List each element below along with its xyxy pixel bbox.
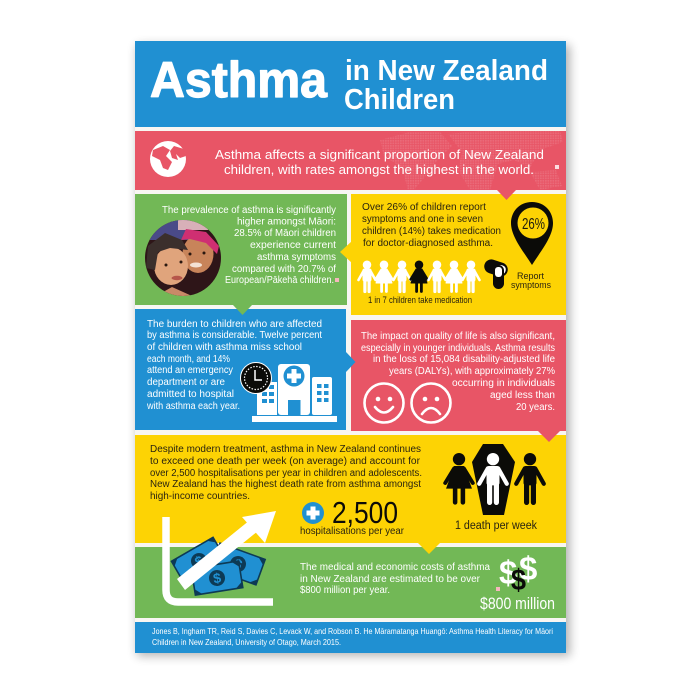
panel: citation footer <box>135 622 566 653</box>
stat: 2,500: 2,500 <box>332 495 398 530</box>
icon: pills <box>482 258 510 289</box>
small marker <box>335 278 339 282</box>
callout arrow: blue to pink <box>346 352 356 372</box>
prevalence text: experience current <box>250 240 336 251</box>
icon: seven children, one highlighted <box>358 261 480 292</box>
label: 1 in 7 children: 1 in 7 children take medication <box>368 295 472 306</box>
subtitle line one: in New Zealand <box>345 55 548 87</box>
intro text: Asthma affects a significant proportion of New Zealand <box>215 148 544 162</box>
icon: dollar signs <box>499 550 537 597</box>
burden text: admitted to hospital <box>147 389 234 400</box>
symptoms text: for doctor-diagnosed asthma. <box>363 238 493 249</box>
citation text: Children in New Zealand, University of Otago, March 2015. <box>152 637 341 647</box>
intro text: children, with rates amongst the highest in the world. <box>224 163 534 177</box>
panel: economic costs <box>135 547 566 618</box>
prevalence text: asthma symptoms <box>257 252 336 263</box>
prevalence text: The prevalence of asthma is significantly <box>162 205 336 216</box>
icon: location pin with 26% <box>511 202 553 265</box>
callout arrow: yellow to green <box>340 241 352 263</box>
mortality text: high-income countries. <box>150 491 250 502</box>
subtitle line two: Children <box>344 84 455 116</box>
arrow: rising trend <box>177 511 276 590</box>
intro text <box>215 148 544 177</box>
callout arrow: pink to yellow lower <box>538 431 560 442</box>
icon: globe <box>150 141 186 177</box>
poster sheet <box>135 41 566 653</box>
icon: coffin with figure <box>472 444 515 515</box>
mortality text: New Zealand has the highest death rate from asthma amongst <box>150 479 421 490</box>
icon: happy face <box>364 384 404 422</box>
quality of life text: occurring in individuals <box>452 378 555 389</box>
panel: symptoms and medication <box>351 194 566 315</box>
quality of life text: 20 years. <box>516 402 555 413</box>
icon: medical cross <box>302 502 324 524</box>
label: report symptoms: symptoms <box>511 280 551 291</box>
dotted world map background <box>380 131 563 190</box>
icon: clock <box>240 362 272 394</box>
mortality text: to exceed one death per week (on average) and account for <box>150 456 421 467</box>
burden text <box>146 319 322 412</box>
prevalence text: higher amongst Māori: <box>237 216 336 228</box>
quality of life text: in the loss of 15,084 disability-adjusted life <box>373 354 555 365</box>
costs text: The medical and economic costs of asthma <box>300 562 490 573</box>
panel: burden to children <box>135 309 346 430</box>
citation text <box>152 626 553 647</box>
quality of life text: especially in younger individuals. Asthma results <box>361 343 555 354</box>
icon: banknotes <box>171 537 265 595</box>
icon: dollar signs: $ <box>511 564 526 597</box>
label: report symptoms <box>511 271 551 291</box>
chart axes <box>166 517 273 602</box>
icon: dollar signs: $ <box>519 550 537 587</box>
quality of life text: years (DALYs), with approximately 27% <box>389 366 555 377</box>
quality of life text: aged less than <box>490 390 555 401</box>
prevalence text: compared with 20.7% of <box>232 264 336 275</box>
callout arrow: pink to yellow <box>497 190 516 200</box>
icon: hospital <box>252 364 337 422</box>
title: Asthma: Asthma <box>150 52 328 108</box>
panel: quality of life <box>351 320 566 431</box>
icon: location pin with 26%: 26% <box>522 216 545 233</box>
panel: prevalence in Māori children <box>135 194 347 305</box>
panel: mortality and hospitalisations <box>135 435 566 543</box>
mortality text <box>150 444 422 502</box>
burden text: department or are <box>147 377 225 388</box>
mortality text: over 2,500 hospitalisations per year in children and adolescents. <box>150 468 422 479</box>
costs text: in New Zealand are estimated to be over <box>300 574 481 585</box>
costs text <box>300 562 490 596</box>
burden text: The burden to children who are affected <box>147 319 322 330</box>
icon: woman figure <box>445 453 473 502</box>
burden text: of children with asthma miss school <box>147 342 302 353</box>
symptoms text: symptoms and one in seven <box>362 214 483 225</box>
burden text: by asthma is considerable. Twelve percent <box>147 330 322 341</box>
icon: sad face <box>412 384 450 422</box>
burden text: each month, and 14% <box>147 354 230 365</box>
callout arrow: yellow to green lower <box>418 543 440 554</box>
icon: banknotes: $ <box>192 552 207 570</box>
small marker <box>555 165 559 169</box>
label: 1 death per week: 1 death per week <box>455 520 537 532</box>
symptoms text: children (14%) takes medication <box>362 226 501 237</box>
mortality text: Despite modern treatment, asthma in New Zealand continues <box>150 444 421 455</box>
poster drop shadow <box>137 45 570 656</box>
panel: title header <box>135 41 566 127</box>
quality of life text <box>361 331 555 413</box>
stat label: hospitalisations per year <box>300 526 405 537</box>
symptoms text: Over 26% of children report <box>362 202 486 213</box>
label: report symptoms: Report <box>517 271 544 282</box>
burden text: with asthma each year. <box>146 401 240 412</box>
costs text: $800 million per year. <box>300 585 390 596</box>
photo: two children <box>145 218 221 296</box>
icon: banknotes: $ <box>232 555 245 573</box>
burden text: attend an emergency <box>147 365 233 376</box>
prevalence text <box>162 205 336 286</box>
stat: $800 million: $800 million <box>480 594 555 613</box>
panel: intro banner <box>135 131 566 190</box>
symptoms text <box>362 202 501 249</box>
prevalence text: European/Pākehā children. <box>225 275 334 286</box>
callout arrow: green to blue <box>233 305 252 315</box>
citation text: Jones B, Ingham TR, Reid S, Davies C, Levack W, and Robson B. He Māramatanga Huangō: Asthma Health Literacy for Māori <box>152 626 553 636</box>
small marker <box>496 587 500 591</box>
quality of life text: The impact on quality of life is also significant, <box>361 331 555 342</box>
icon: dollar signs: $ <box>499 554 517 591</box>
icon: banknotes: $ <box>212 569 222 586</box>
icon: man figure <box>516 453 544 502</box>
prevalence text: 28.5% of Māori children <box>234 228 336 239</box>
